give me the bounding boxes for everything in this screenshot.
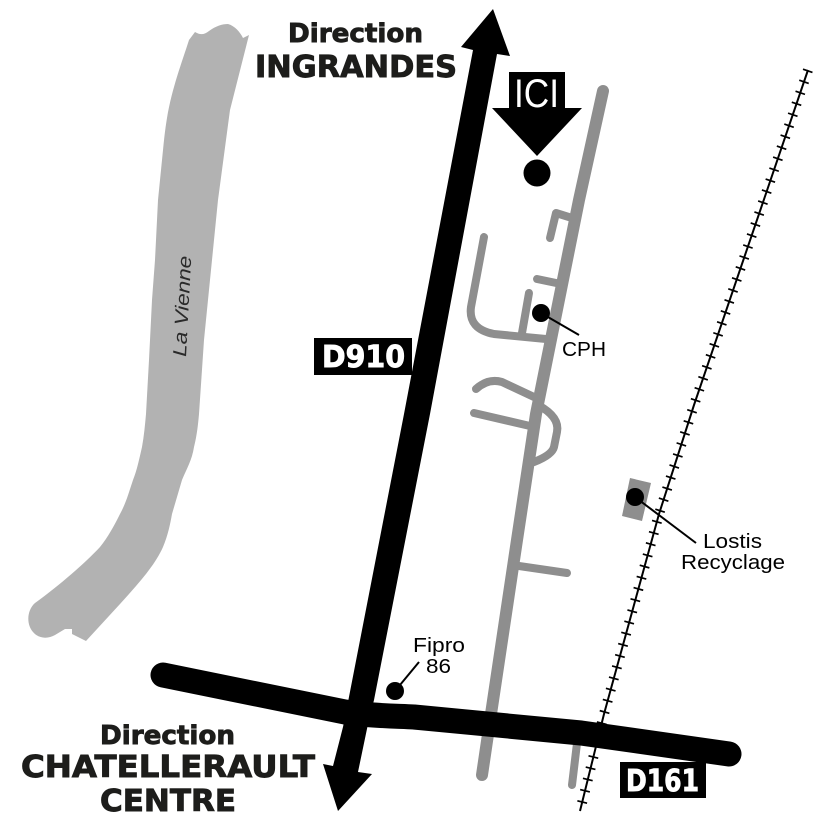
- road D161: [163, 675, 729, 754]
- river label: La Vienne: [170, 255, 196, 357]
- river: La Vienne: [28, 24, 249, 641]
- label: CPH: CPH: [562, 339, 606, 361]
- road label: D910: D910: [322, 340, 405, 375]
- heading: direction Chatellerault centre: CHATELLERAULT: [21, 750, 316, 785]
- destination dot: [524, 160, 550, 186]
- side road: hook: [550, 213, 572, 238]
- road label: D161: D161: [626, 764, 699, 799]
- side road: stub: [537, 279, 561, 284]
- heading: direction Chatellerault centre: CENTRE: [100, 784, 236, 819]
- side road: upper bend: [476, 381, 534, 397]
- marker: ICI arrow: ICI: [514, 72, 559, 116]
- main local road: [482, 91, 603, 775]
- side road: south branch: [519, 566, 567, 573]
- second road stub: [572, 735, 578, 785]
- local road network: [471, 91, 603, 785]
- heading: direction Chatellerault centre: Direction: [100, 721, 235, 751]
- heading: direction Ingrandes: [255, 19, 457, 85]
- road D910 with double arrow: [323, 9, 510, 811]
- heading: direction Chatellerault centre: [21, 721, 316, 819]
- label: Lostis Recyclage: [622, 478, 785, 574]
- side road: long curve: [471, 237, 546, 339]
- side road: short branch: [522, 293, 529, 333]
- label: Lostis Recyclage: Lostis: [703, 531, 762, 553]
- heading: direction Ingrandes: INGRANDES: [255, 50, 457, 85]
- label: Fipro 86: Fipro: [413, 635, 465, 657]
- label: Lostis Recyclage: Recyclage: [681, 552, 785, 574]
- label: Fipro 86: 86: [426, 656, 451, 678]
- marker: ICI arrow: [492, 72, 582, 156]
- side road: loop: [534, 405, 557, 462]
- heading: direction Ingrandes: Direction: [288, 19, 423, 49]
- label: Fipro 86: [386, 635, 465, 700]
- label: CPH: [532, 304, 606, 361]
- side road: lower branch: [474, 413, 530, 426]
- railway line: [580, 70, 808, 811]
